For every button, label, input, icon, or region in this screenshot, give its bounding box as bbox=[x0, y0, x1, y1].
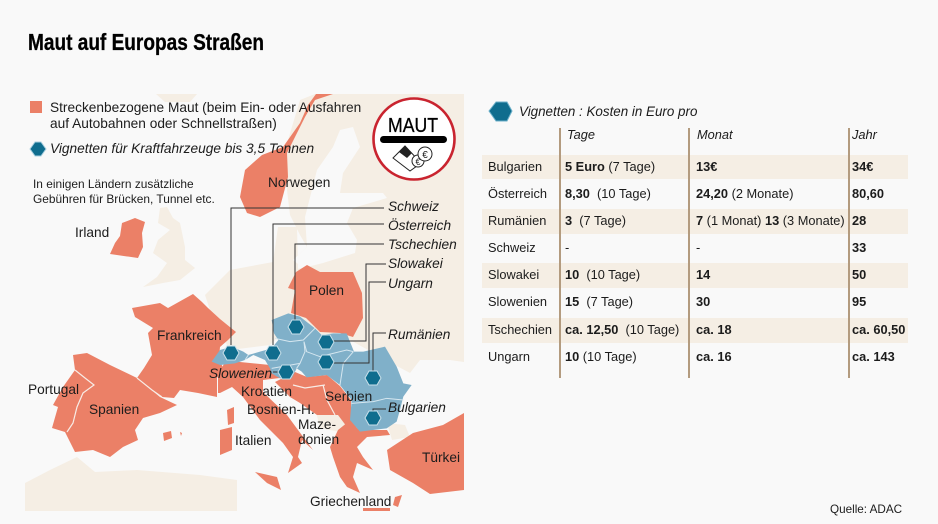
map legend bbox=[30, 100, 361, 206]
row: Ungarn: ca. 16 bbox=[696, 349, 732, 364]
row: Slowenien bbox=[488, 294, 866, 309]
row: Österreich: 8,30 (10 Tage) bbox=[565, 186, 651, 201]
map: country labels: Polen bbox=[309, 283, 344, 298]
row: Schweiz: Schweiz bbox=[488, 240, 536, 255]
row: Tschechien: ca. 12,50 (10 Tage) bbox=[565, 322, 679, 337]
source: Quelle: ADAC bbox=[830, 503, 902, 516]
row: Tschechien: ca. 60,50 bbox=[852, 322, 905, 337]
legend: toll swatch bbox=[30, 101, 42, 113]
Croatia, Bosnia, Serbia bbox=[275, 372, 357, 428]
row: Österreich: Österreich bbox=[488, 186, 547, 201]
map: country labels: Slowenien bbox=[209, 366, 272, 381]
row: Tschechien bbox=[488, 322, 905, 337]
row: Slowakei: 50 bbox=[852, 267, 866, 282]
map: country labels: Serbien bbox=[325, 389, 372, 404]
icon: Maut sign: € bbox=[415, 157, 421, 167]
map: country labels bbox=[28, 175, 460, 509]
map: country labels: Maze- bbox=[298, 417, 336, 432]
column headers: Jahr bbox=[851, 127, 878, 142]
map: Baltic Sea bbox=[293, 127, 387, 268]
icon: Maut sign: MAUT bbox=[388, 115, 438, 137]
table row bands bbox=[482, 155, 908, 343]
column headers bbox=[567, 127, 878, 142]
row: Bulgarien: 13€ bbox=[696, 159, 717, 174]
Norway bbox=[240, 94, 333, 217]
Italy bbox=[218, 362, 313, 473]
map: country labels: Tschechien bbox=[388, 237, 457, 252]
row: Slowakei bbox=[488, 267, 866, 282]
column headers: Monat bbox=[697, 127, 733, 142]
row: Slowakei: Slowakei bbox=[488, 267, 539, 282]
panel: map of Europe bbox=[25, 94, 464, 511]
row: Ungarn bbox=[488, 349, 895, 364]
row: Slowakei: 14 bbox=[696, 267, 711, 282]
panel: vignette cost table bbox=[482, 102, 908, 378]
row: Rumänien bbox=[488, 213, 866, 228]
map: country labels: Österreich bbox=[388, 218, 451, 233]
table heading: Vignetten : Kosten in Euro pro bbox=[519, 104, 698, 119]
row: Ungarn: 10 (10 Tage) bbox=[565, 349, 637, 364]
row: Bulgarien bbox=[488, 159, 873, 174]
row: Schweiz: - bbox=[696, 240, 700, 255]
legend: toll text: Streckenbezogene Maut (beim Ein- oder Ausfahren bbox=[50, 100, 361, 115]
Greece and Albania bbox=[330, 422, 390, 493]
row: Slowenien: 15 (7 Tage) bbox=[565, 294, 633, 309]
note: In einigen Ländern zusätzliche bbox=[33, 177, 194, 191]
note: Gebühren für Brücken, Tunnel etc. bbox=[33, 192, 215, 206]
row: Tschechien: Tschechien bbox=[488, 322, 552, 337]
row: Österreich: 80,60 bbox=[852, 186, 884, 201]
row: Schweiz: 33 bbox=[852, 240, 866, 255]
map: country labels: Slowakei bbox=[388, 256, 444, 271]
row: Rumänien: 3 (7 Tage) bbox=[565, 213, 626, 228]
Ireland bbox=[110, 218, 145, 258]
map: country labels: Schweiz bbox=[388, 199, 439, 214]
legend: vignette icon bbox=[30, 142, 46, 156]
map: vignette markers bbox=[223, 320, 381, 425]
map: country labels: Bulgarien bbox=[388, 400, 446, 415]
row: Schweiz bbox=[488, 240, 866, 255]
France bbox=[132, 294, 236, 398]
row: Bulgarien: 5 Euro (7 Tage) bbox=[565, 159, 655, 174]
row: Slowakei: 10 (10 Tage) bbox=[565, 267, 640, 282]
icon: Maut sign bbox=[374, 98, 454, 180]
map: country labels: Griechenland bbox=[310, 494, 391, 509]
title: Maut auf Europas Straßen bbox=[28, 29, 264, 55]
legend: toll text: auf Autobahnen oder Schnellstraßen) bbox=[50, 116, 277, 131]
map: country labels: Norwegen bbox=[268, 175, 330, 190]
row: Bulgarien: 34€ bbox=[852, 159, 873, 174]
row: Ungarn: ca. 143 bbox=[852, 349, 895, 364]
map: country labels: Portugal bbox=[28, 382, 79, 397]
table column rules bbox=[560, 128, 849, 378]
row: Rumänien: 28 bbox=[852, 213, 866, 228]
map: country labels: Spanien bbox=[89, 402, 139, 417]
map: borders bbox=[67, 370, 335, 432]
row: Rumänien: 7 (1 Monat) 13 (3 Monate) bbox=[696, 213, 845, 228]
row: Bulgarien: Bulgarien bbox=[488, 159, 542, 174]
legend: vignette text: Vignetten für Kraftfahrzeuge bis 3,5 Tonnen bbox=[50, 141, 314, 156]
Turkey bbox=[387, 413, 464, 494]
map: country labels: Ungarn bbox=[388, 276, 433, 291]
icon: Maut sign: € bbox=[422, 150, 428, 161]
map: leader lines bbox=[231, 208, 386, 412]
map: country labels: Türkei bbox=[422, 450, 460, 465]
map: vignette countries (blue) bbox=[212, 313, 412, 432]
icon: vignette hexagon bbox=[489, 102, 512, 121]
map: country labels: Italien bbox=[235, 433, 272, 448]
column headers: Tage bbox=[567, 127, 595, 142]
row: Tschechien: ca. 18 bbox=[696, 322, 732, 337]
row: Österreich: 24,20 (2 Monate) bbox=[696, 186, 793, 201]
map: country labels: Kroatien bbox=[241, 384, 292, 399]
row: Slowenien: 95 bbox=[852, 294, 866, 309]
map: country labels: Bosnien-H. bbox=[247, 402, 315, 417]
row: Slowenien: Slowenien bbox=[488, 294, 547, 309]
map: country labels: donien bbox=[298, 432, 339, 447]
Poland bbox=[288, 265, 363, 337]
row: Österreich bbox=[488, 186, 884, 201]
Sicily, Sardinia, Corsica, Balearics bbox=[255, 472, 281, 490]
map: country labels: Rumänien bbox=[388, 327, 450, 342]
map: country labels: Irland bbox=[75, 225, 109, 240]
row: Ungarn: Ungarn bbox=[488, 349, 530, 364]
row: Slowenien: 30 bbox=[696, 294, 710, 309]
map: neighbouring land bbox=[25, 94, 464, 511]
map: country labels: Frankreich bbox=[157, 328, 222, 343]
row: Rumänien: Rumänien bbox=[488, 213, 546, 228]
Spain and Portugal bbox=[52, 353, 177, 457]
map: toll countries (red) bbox=[52, 94, 464, 511]
row: Schweiz: - bbox=[565, 240, 569, 255]
